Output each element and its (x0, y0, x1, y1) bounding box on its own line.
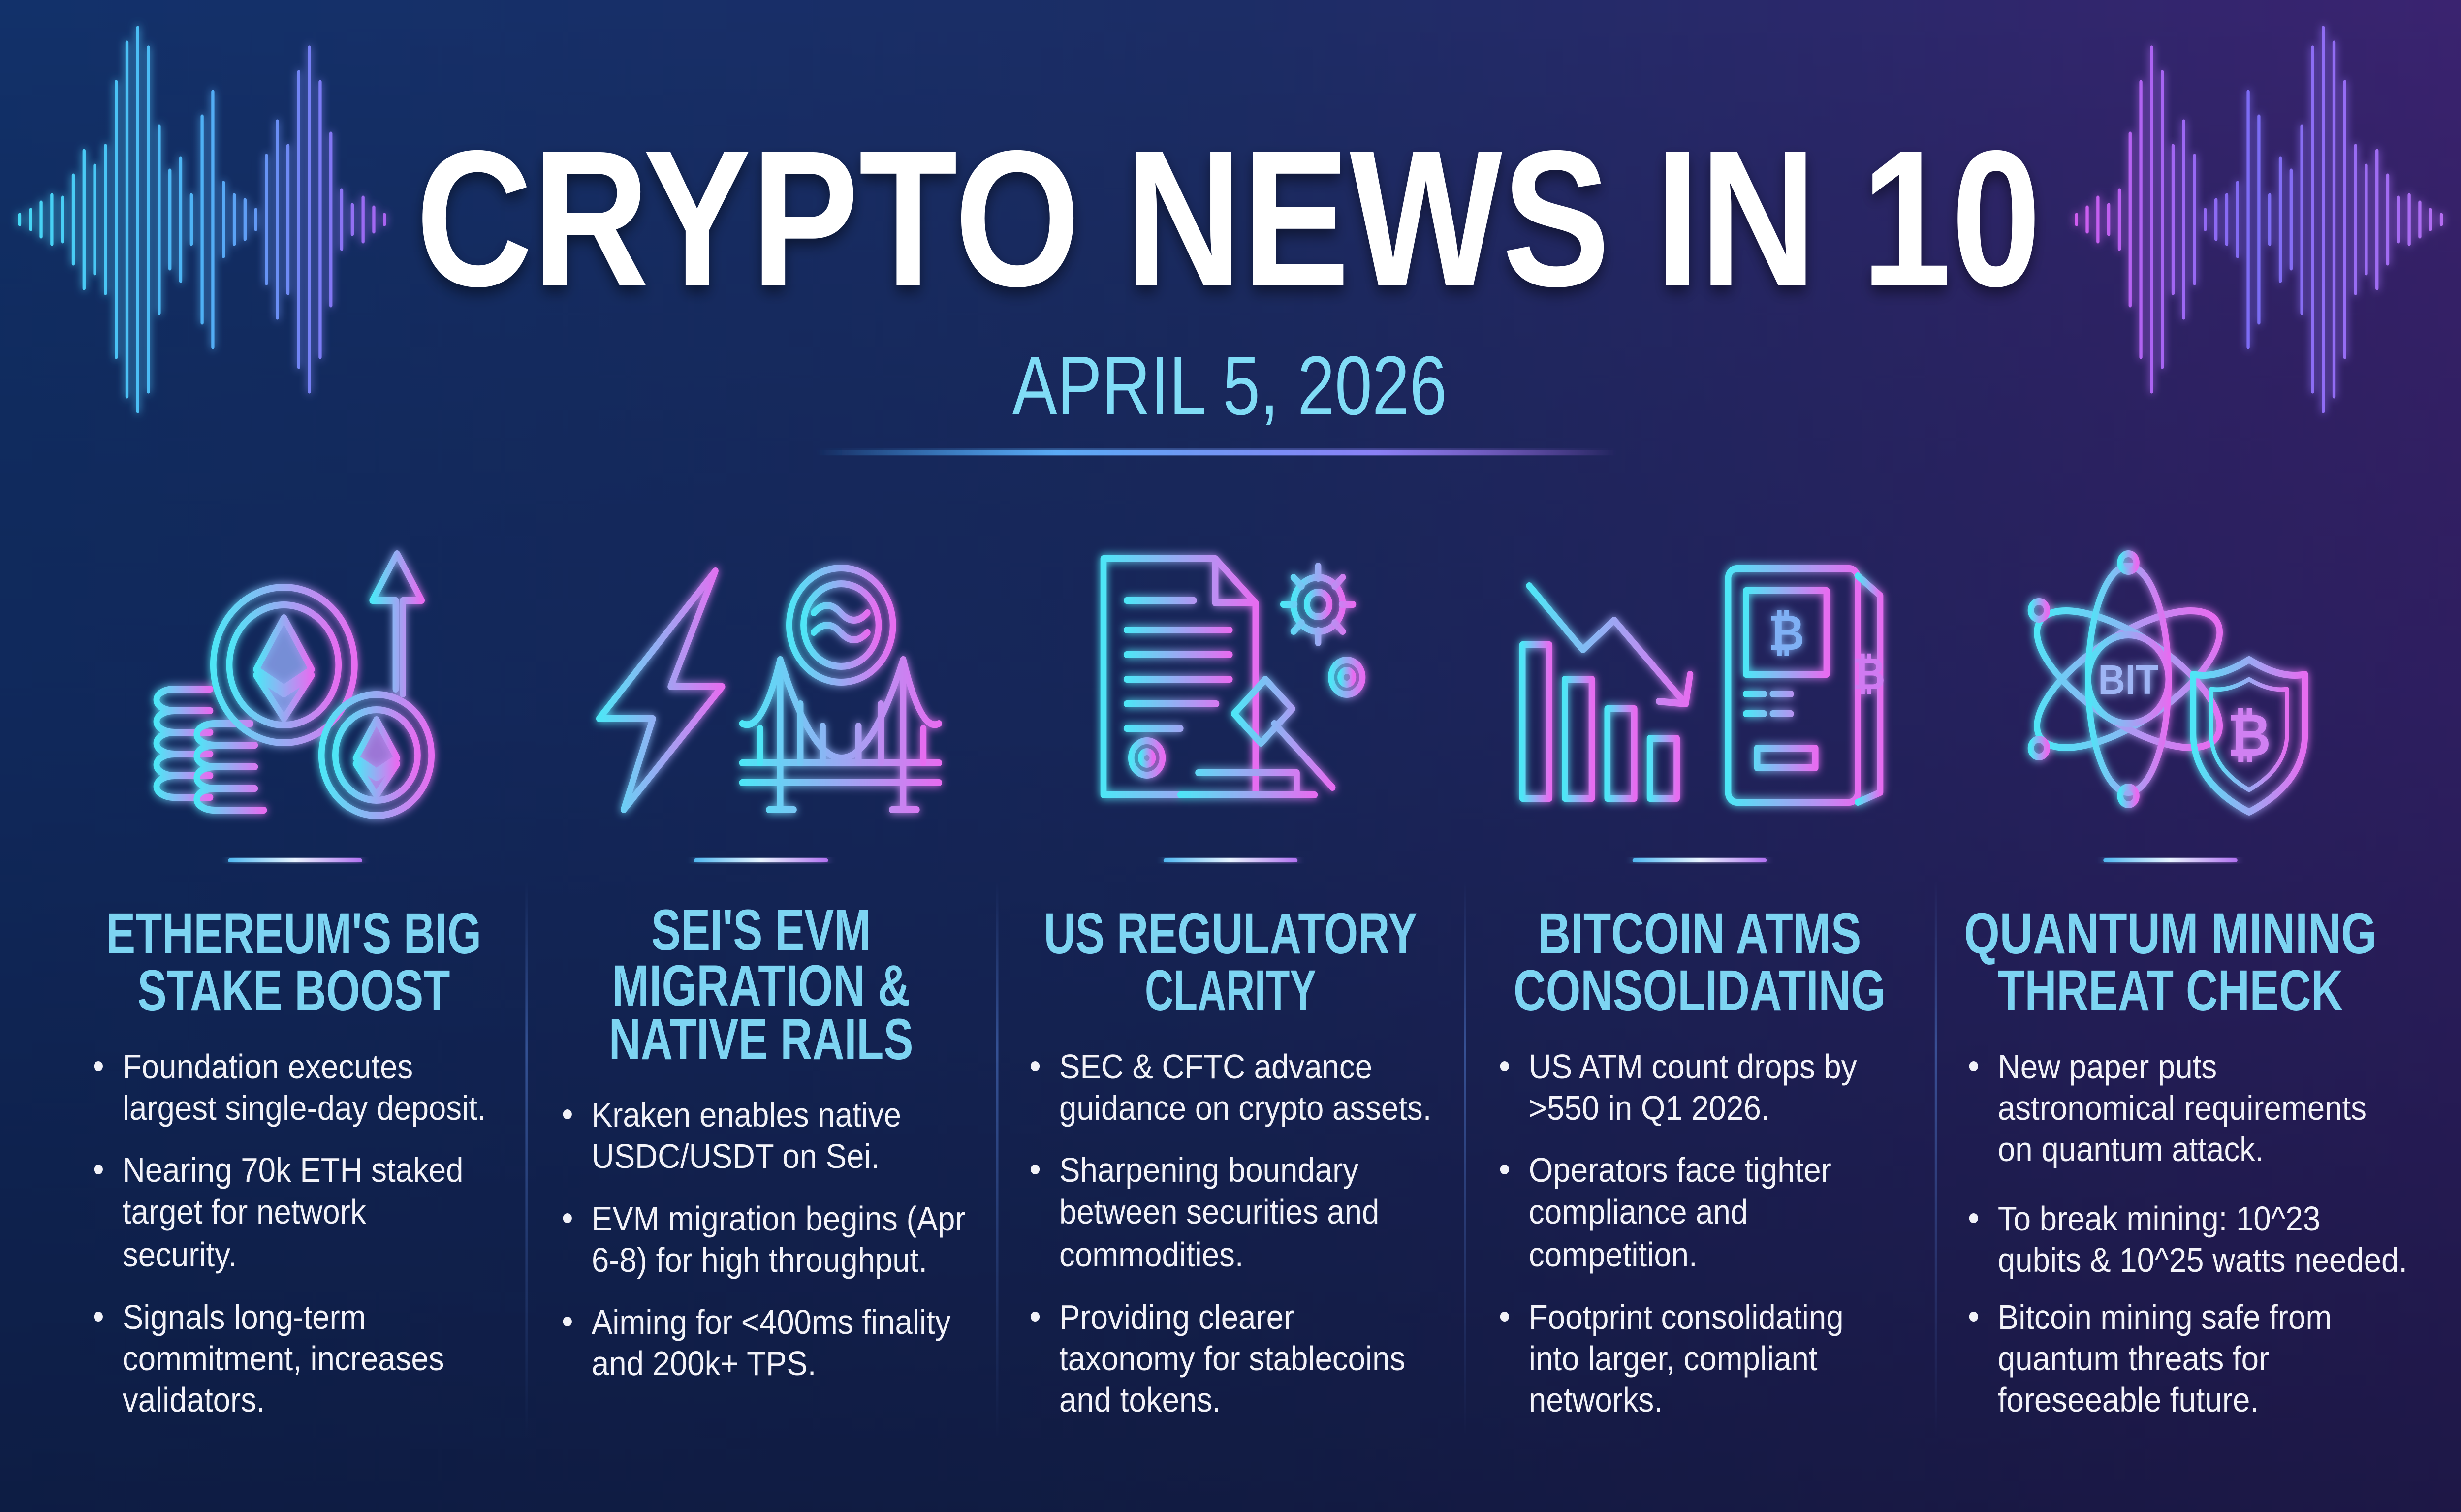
panel: us regulatory: guidance on crypto assets. (1059, 1089, 1431, 1128)
panel: quantum mining: quantum threats for (1998, 1339, 2269, 1378)
panel: bitcoin atms: into larger, compliant (1529, 1339, 1818, 1378)
panel: sei evm: 6-8) for high throughput. (592, 1241, 927, 1280)
panel: bitcoin atms: compliance and (1529, 1193, 1748, 1231)
panel: quantum mining: astronomical requirements (1998, 1089, 2366, 1128)
column dividers (525, 881, 1937, 1437)
underline (228, 858, 362, 862)
panel: quantum mining: Bitcoin mining safe from (1998, 1298, 2332, 1337)
panel: sei evm: and 200k+ TPS. (592, 1344, 816, 1383)
panel: quantum mining: To break mining: 10^23 (1998, 1199, 2320, 1238)
icon: declining chart and atm: ₿ (1853, 649, 1886, 699)
panel: bitcoin atms: >550 in Q1 2026. (1529, 1089, 1770, 1128)
icon: atom with BIT and bitcoin shield (2019, 554, 2305, 812)
panel: quantum mining: foreseeable future. (1998, 1381, 2259, 1419)
panel: bitcoin atms: Footprint consolidating (1529, 1298, 1844, 1337)
panel: us regulatory: and tokens. (1059, 1381, 1221, 1419)
heading (106, 901, 481, 1023)
panel: bitcoin atms (1500, 568, 1886, 1419)
heading: STAKE BOOST (137, 958, 450, 1023)
panel: us regulatory: US REGULATORY (1044, 901, 1417, 966)
panel: us regulatory: Providing clearer (1059, 1298, 1294, 1337)
panel: sei evm: SEI'S EVM (651, 897, 871, 962)
panel: sei evm: EVM migration begins (Apr (592, 1199, 966, 1238)
bullets: commitment, increases (123, 1339, 444, 1378)
icon: lightning, sei coin, bridge (599, 568, 939, 810)
panel: bitcoin atms: networks. (1529, 1381, 1663, 1419)
panel: bitcoin atms: competition. (1529, 1235, 1698, 1274)
bullets: largest single-day deposit. (123, 1089, 486, 1128)
panel: bitcoin atms: CONSOLIDATING (1514, 958, 1886, 1023)
title underline (816, 450, 1616, 455)
waveform: right (2077, 28, 2441, 411)
panel: us regulatory: taxonomy for stablecoins (1059, 1339, 1405, 1378)
icon: document, gears, gavel (1104, 559, 1362, 795)
panel: sei evm: USDC/USDT on Sei. (592, 1137, 880, 1176)
panel: sei evm: Kraken enables native (592, 1096, 901, 1134)
icon: ethereum coins with arrow (157, 554, 432, 816)
panel: sei evm: MIGRATION & (612, 953, 910, 1018)
panel: bitcoin atms: US ATM count drops by (1529, 1047, 1857, 1086)
panel: quantum mining: on quantum attack. (1998, 1130, 2264, 1169)
panel: quantum mining: New paper puts (1998, 1047, 2217, 1086)
panel: us regulatory (1031, 559, 1431, 1419)
icon: declining chart and atm: ₿ (1768, 606, 1804, 661)
bullets: target for network (123, 1193, 366, 1231)
heading: ETHEREUM'S BIG (106, 901, 481, 966)
panel: quantum mining (1964, 554, 2407, 1419)
panel: sei evm: Aiming for <400ms finality (592, 1303, 951, 1342)
panel: us regulatory: commodities. (1059, 1235, 1244, 1274)
panel: ethereum stake (94, 554, 486, 1419)
bullets: security. (123, 1235, 237, 1274)
panel: quantum mining: THREAT CHECK (1998, 958, 2343, 1023)
bullets: Nearing 70k ETH staked (123, 1151, 464, 1190)
panel: us regulatory: SEC & CFTC advance (1059, 1047, 1372, 1086)
panel: sei evm (563, 568, 966, 1383)
bullets: Foundation executes (123, 1047, 413, 1086)
panel: sei evm: NATIVE RAILS (609, 1007, 913, 1071)
title: CRYPTO NEWS IN 10 (416, 110, 2041, 327)
panel: quantum mining: QUANTUM MINING (1964, 901, 2377, 966)
waveform: left (20, 28, 384, 411)
icon: declining chart and atm (1516, 568, 1886, 802)
panel: us regulatory: CLARITY (1145, 958, 1316, 1023)
panel: quantum mining: qubits & 10^25 watts needed. (1998, 1241, 2407, 1280)
icon: atom with BIT and bitcoin shield: ₿ (2227, 702, 2271, 768)
panel: bitcoin atms: Operators face tighter (1529, 1151, 1831, 1190)
date: APRIL 5, 2026 (1012, 339, 1447, 433)
bullets: Signals long-term (123, 1298, 366, 1337)
bullets: validators. (123, 1381, 265, 1419)
panel: bitcoin atms: BITCOIN ATMS (1538, 901, 1861, 966)
icon: atom with BIT and bitcoin shield: BIT (2098, 657, 2159, 703)
bullets (94, 1047, 486, 1419)
panel: us regulatory: Sharpening boundary (1059, 1151, 1359, 1190)
panel: us regulatory: between securities and (1059, 1193, 1379, 1231)
